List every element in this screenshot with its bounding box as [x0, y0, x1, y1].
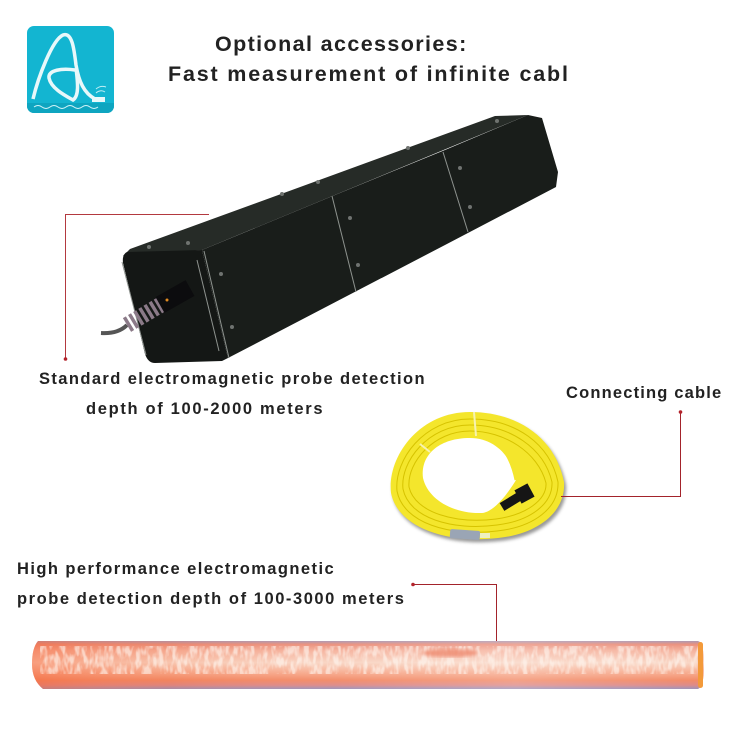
- probe connector cable: [101, 288, 190, 333]
- leader line: connecting cable: [561, 412, 680, 496]
- label: high performance probe: probe detection depth of 100-3000 meters: [17, 590, 405, 608]
- leader line: high performance probe: [413, 584, 496, 642]
- title: [168, 32, 570, 86]
- label: standard probe: [39, 370, 426, 418]
- probe side face: [202, 115, 558, 358]
- label: high performance probe: [17, 560, 405, 608]
- probe end face: [123, 250, 228, 363]
- coil centre opening: [423, 438, 516, 513]
- cable metal connector: [450, 529, 480, 540]
- yellow connecting cable coil: [391, 412, 566, 542]
- icon: company logo: [27, 26, 114, 113]
- label: connecting cable: Connecting cable: [566, 384, 722, 402]
- black electromagnetic probe: [101, 115, 558, 363]
- title: Fast measurement of infinite cabl: [168, 62, 570, 86]
- label: high performance probe: High performance electromagnetic: [17, 560, 335, 578]
- label: standard probe: Standard electromagnetic probe detection: [39, 370, 426, 388]
- title: Optional accessories:: [215, 32, 468, 56]
- probe top face: [123, 115, 528, 256]
- leader line: standard probe: [66, 214, 209, 359]
- orange high performance probe: [32, 641, 704, 689]
- label: standard probe: depth of 100-2000 meters: [86, 400, 324, 418]
- cable plug: [502, 496, 520, 507]
